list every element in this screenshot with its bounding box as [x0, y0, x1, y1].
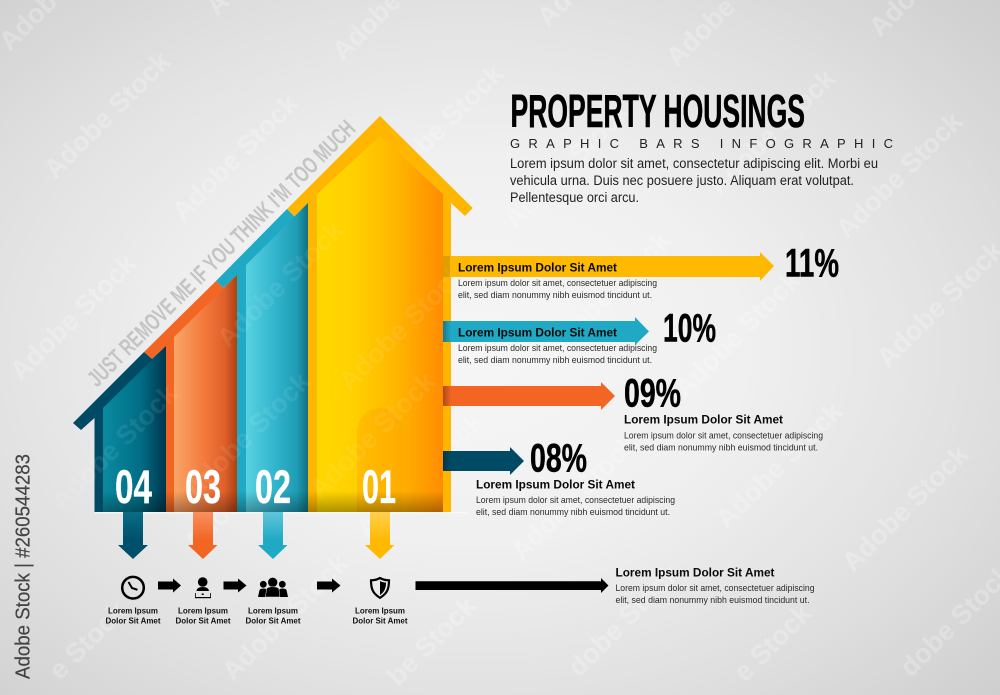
arrow: long arrow to final note [416, 578, 608, 593]
watermark pattern: e Stock [43, 595, 133, 685]
watermark pattern: Adobe Stock [710, 396, 849, 534]
step label: clock [106, 606, 161, 626]
row description [624, 430, 823, 452]
final note description: elit, sed diam nonummy nibh euismod tincidunt ut. [616, 595, 810, 605]
arrow: step three to four [317, 578, 340, 592]
watermark pattern: e Stock [728, 597, 818, 687]
watermark pattern: Adobe Stock [351, 406, 490, 544]
watermark pattern: Adobe Stock [498, 96, 637, 234]
step label: group [246, 606, 301, 626]
faint watermark over the bars: Adobe Stock [178, 366, 317, 504]
bar 04 teal [73, 346, 166, 512]
final note description: Lorem ipsum dolor sit amet, consectetuer adipiscing [616, 583, 814, 593]
faint watermark over the bars: Adobe Stock [303, 366, 442, 504]
row description: Lorem ipsum dolor sit amet, consectetuer adipiscing [624, 430, 823, 440]
step label: shield [352, 606, 408, 626]
watermark pattern: Adobe Stock [505, 428, 644, 566]
arrow: blue [443, 317, 649, 345]
arrow: teal [443, 447, 524, 475]
intro paragraph: Pellentesque orci arcu. [510, 190, 639, 205]
row description [458, 278, 657, 300]
arrow: step one to two [158, 578, 181, 592]
step label: group: Dolor Sit Amet [246, 616, 301, 626]
icon: clock [122, 577, 144, 598]
intro paragraph: vehicula urna. Duis nec posuere justo. Aliquam erat volutpat. [510, 173, 854, 188]
bottom shadow of the house [103, 491, 443, 512]
row 11% [443, 242, 839, 300]
watermark pattern: Adobe Stock [4, 248, 143, 386]
value 10%: 10% [663, 306, 716, 350]
row description: elit, sed diam nonummy nibh euismod tincidunt ut. [458, 355, 652, 365]
watermark pattern: Adobe Stock [38, 46, 177, 184]
subtitle: GRAPHIC BARS INFOGRAPHIC [510, 136, 893, 151]
row 10% [443, 306, 716, 365]
intro paragraph [510, 156, 878, 205]
down arrow: orange [188, 512, 218, 559]
watermark pattern: Adobe Stock [668, 265, 807, 403]
row description: elit, sed diam nonummy nibh euismod tincidunt ut. [624, 442, 818, 452]
watermark pattern: dobe Stock [562, 557, 687, 682]
down arrow: blue [258, 512, 288, 559]
bar number 02: 02 [255, 460, 291, 513]
faint watermark over the bars: Adobe Stock [333, 258, 472, 396]
row description: elit, sed diam nonummy nibh euismod tincidunt ut. [458, 290, 652, 300]
row description: Lorem ipsum dolor sit amet, consectetuer adipiscing [476, 495, 675, 505]
down arrow: teal [118, 512, 148, 559]
bar number 01: 01 [362, 460, 396, 513]
step label: clock: Dolor Sit Amet [106, 616, 161, 626]
final note heading: Lorem Ipsum Dolor Sit Amet [616, 566, 774, 580]
row 09% [443, 372, 823, 452]
down arrows under the bars [118, 512, 394, 559]
watermark pattern: Adobe Stock [216, 548, 355, 686]
row description: Lorem ipsum dolor sit amet, consectetuer adipiscing [458, 278, 657, 288]
bar 01 yellow [287, 116, 473, 512]
row description [476, 495, 675, 517]
value 11%: 11% [785, 242, 839, 286]
row description: elit, sed diam nonummy nibh euismod tincidunt ut. [476, 507, 670, 517]
icon: group of people [258, 578, 288, 597]
watermark pattern: Adobe Stock [166, 88, 305, 226]
step label: shield: Lorem Ipsum [355, 606, 405, 616]
faint watermark over the bars: Adobe Stock [211, 215, 350, 353]
watermark pattern: Adobe Stock [371, 58, 510, 196]
arrow: orange [443, 382, 615, 410]
bar 02 blue [216, 203, 308, 512]
value 09%: 09% [624, 372, 681, 416]
slanted roof caption: JUST REMOVE ME IF YOU THINK I'M TOO MUCH [82, 115, 360, 392]
watermark pattern: Adobe Stock [830, 106, 969, 244]
stock id vertical text: Adobe Stock | #260544283 [12, 454, 34, 679]
icon: person at laptop [195, 577, 211, 598]
row 08% [443, 436, 675, 517]
watermark pattern: be Stock [381, 590, 483, 691]
watermark pattern: Adobe Stock [178, 420, 317, 558]
row heading: Lorem Ipsum Dolor Sit Amet [458, 326, 617, 340]
intro paragraph: Lorem ipsum dolor sit amet, consectetur adipiscing elit. Morbi eu [510, 156, 878, 171]
bar number 03: 03 [185, 460, 221, 513]
faint watermark over the bars [45, 215, 472, 516]
step label: person [176, 606, 231, 626]
bar 03 orange [144, 275, 237, 512]
light strip under the house [95, 512, 467, 514]
faint watermark over the bars: Adobe Stock [45, 378, 184, 516]
icon: shield [371, 578, 389, 598]
value 08%: 08% [530, 436, 587, 480]
row description [458, 343, 657, 365]
watermark pattern: Adobe Stock [538, 225, 677, 363]
step label: person: Lorem Ipsum [178, 606, 228, 616]
step label: shield: Dolor Sit Amet [352, 616, 408, 626]
row heading: Lorem Ipsum Dolor Sit Amet [458, 260, 617, 274]
step label: person: Dolor Sit Amet [176, 616, 231, 626]
watermark pattern: Adobe Stock [836, 439, 975, 577]
step label: clock: Lorem Ipsum [108, 606, 158, 616]
watermark pattern: Adobe Stock [703, 63, 842, 201]
row heading: Lorem Ipsum Dolor Sit Amet [624, 412, 783, 426]
down arrow: yellow [365, 512, 394, 559]
arrow: yellow [443, 252, 774, 281]
bar number 04: 04 [115, 460, 152, 513]
row heading: Lorem Ipsum Dolor Sit Amet [476, 478, 635, 492]
final note description [616, 583, 814, 605]
row description: Lorem ipsum dolor sit amet, consectetuer adipiscing [458, 343, 657, 353]
arrow: step two to three [224, 578, 246, 592]
step label: group: Lorem Ipsum [248, 606, 298, 616]
house bar chart [45, 116, 473, 516]
process row [106, 566, 814, 626]
